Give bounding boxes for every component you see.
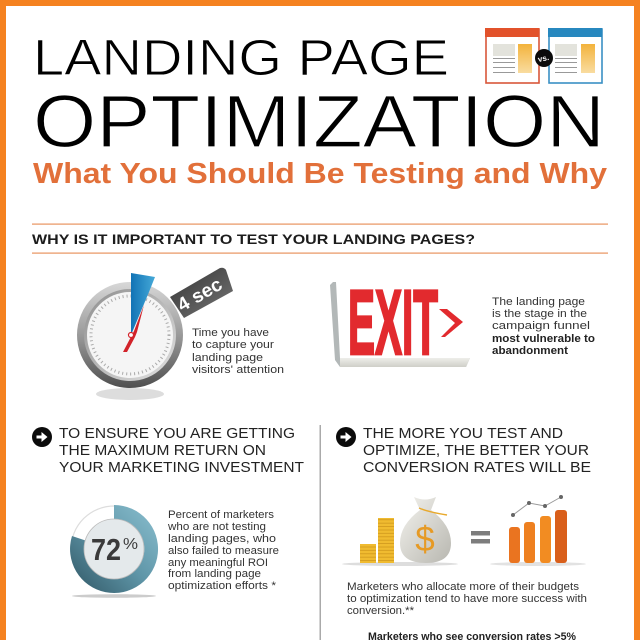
- section heading: WHY IS IT IMPORTANT TO TEST YOUR LANDING PAGES?: [32, 231, 475, 247]
- heading: test and optimize: THE MORE YOU TEST AND: [363, 425, 563, 442]
- icon: stopwatch: [77, 268, 233, 400]
- equals sign: [471, 531, 490, 544]
- text: exit explanation: campaign funnel: [492, 320, 590, 332]
- icon: A/B test page comparison: [485, 28, 602, 83]
- bar chart with trend line: [490, 495, 586, 566]
- icon: exit sign: EXIT: [348, 272, 438, 375]
- heading: marketing investment: THE MAXIMUM RETURN ON: [59, 442, 266, 459]
- text: exit explanation: most vulnerable to: [492, 333, 595, 345]
- panel: marketing investment: [32, 425, 304, 598]
- text: time to capture attention: [192, 327, 284, 376]
- icon: A/B test page comparison: vs.: [537, 53, 550, 64]
- heading: marketing investment: [59, 425, 304, 476]
- text: percent of marketers: also failed to measure: [168, 545, 279, 557]
- divider rules: [32, 224, 608, 254]
- donut chart 72%: [70, 505, 158, 598]
- text: exit explanation: abandonment: [492, 345, 568, 357]
- time tag: [170, 268, 233, 318]
- panel: test and optimize: [336, 425, 591, 640]
- heading: marketing investment: YOUR MARKETING INVESTMENT: [59, 459, 304, 476]
- column divider: [320, 425, 321, 640]
- text: percent of marketers: who are not testing: [167, 521, 266, 533]
- text: budget allocation: to optimization tend to have more success with: [347, 593, 587, 605]
- icon: arrow bullet left: [32, 427, 52, 447]
- text: percent of marketers: from landing page: [168, 568, 261, 580]
- heading: test and optimize: [363, 425, 591, 476]
- text: time to capture attention: visitors' attention: [192, 364, 284, 376]
- text: budget allocation: conversion.**: [347, 605, 415, 617]
- text: time to capture attention: Time you have: [192, 327, 269, 339]
- icon: exit sign: [330, 272, 470, 375]
- icon: arrow bullet right: [336, 427, 356, 447]
- text: time to capture attention: landing page: [192, 352, 263, 364]
- subtitle: What You Should Be Testing and Why: [33, 158, 607, 190]
- text: exit explanation: [492, 296, 595, 357]
- text: exit explanation: is the stage in the: [492, 308, 587, 320]
- text: percent of marketers: any meaningful ROI: [168, 557, 268, 569]
- title: [33, 29, 605, 163]
- text: budget allocation: Marketers who allocate more of their budgets: [347, 581, 579, 593]
- icon: coins and money bag: $: [415, 520, 435, 559]
- icon: coins and money bag: [342, 497, 458, 566]
- text: percent of marketers: optimization efforts *: [168, 580, 277, 592]
- time tag: 4 sec: [174, 274, 226, 316]
- title: OPTIMIZATION: [33, 80, 605, 163]
- text: exit explanation: The landing page: [492, 296, 585, 308]
- donut chart 72%: 72: [91, 532, 121, 567]
- heading: test and optimize: CONVERSION RATES WILL BE: [363, 459, 591, 476]
- title: LANDING PAGE: [33, 29, 449, 86]
- heading: test and optimize: OPTIMIZE, THE BETTER YOUR: [363, 442, 589, 459]
- text: percent of marketers: [167, 509, 279, 592]
- text: percent of marketers: landing pages, who: [168, 533, 276, 545]
- donut chart 72%: %: [123, 536, 138, 553]
- text: time to capture attention: to capture your: [192, 339, 274, 351]
- text: percent of marketers: Percent of marketers: [168, 509, 274, 521]
- text: budget allocation: [347, 581, 587, 617]
- heading: marketing investment: TO ENSURE YOU ARE GETTING: [59, 425, 295, 442]
